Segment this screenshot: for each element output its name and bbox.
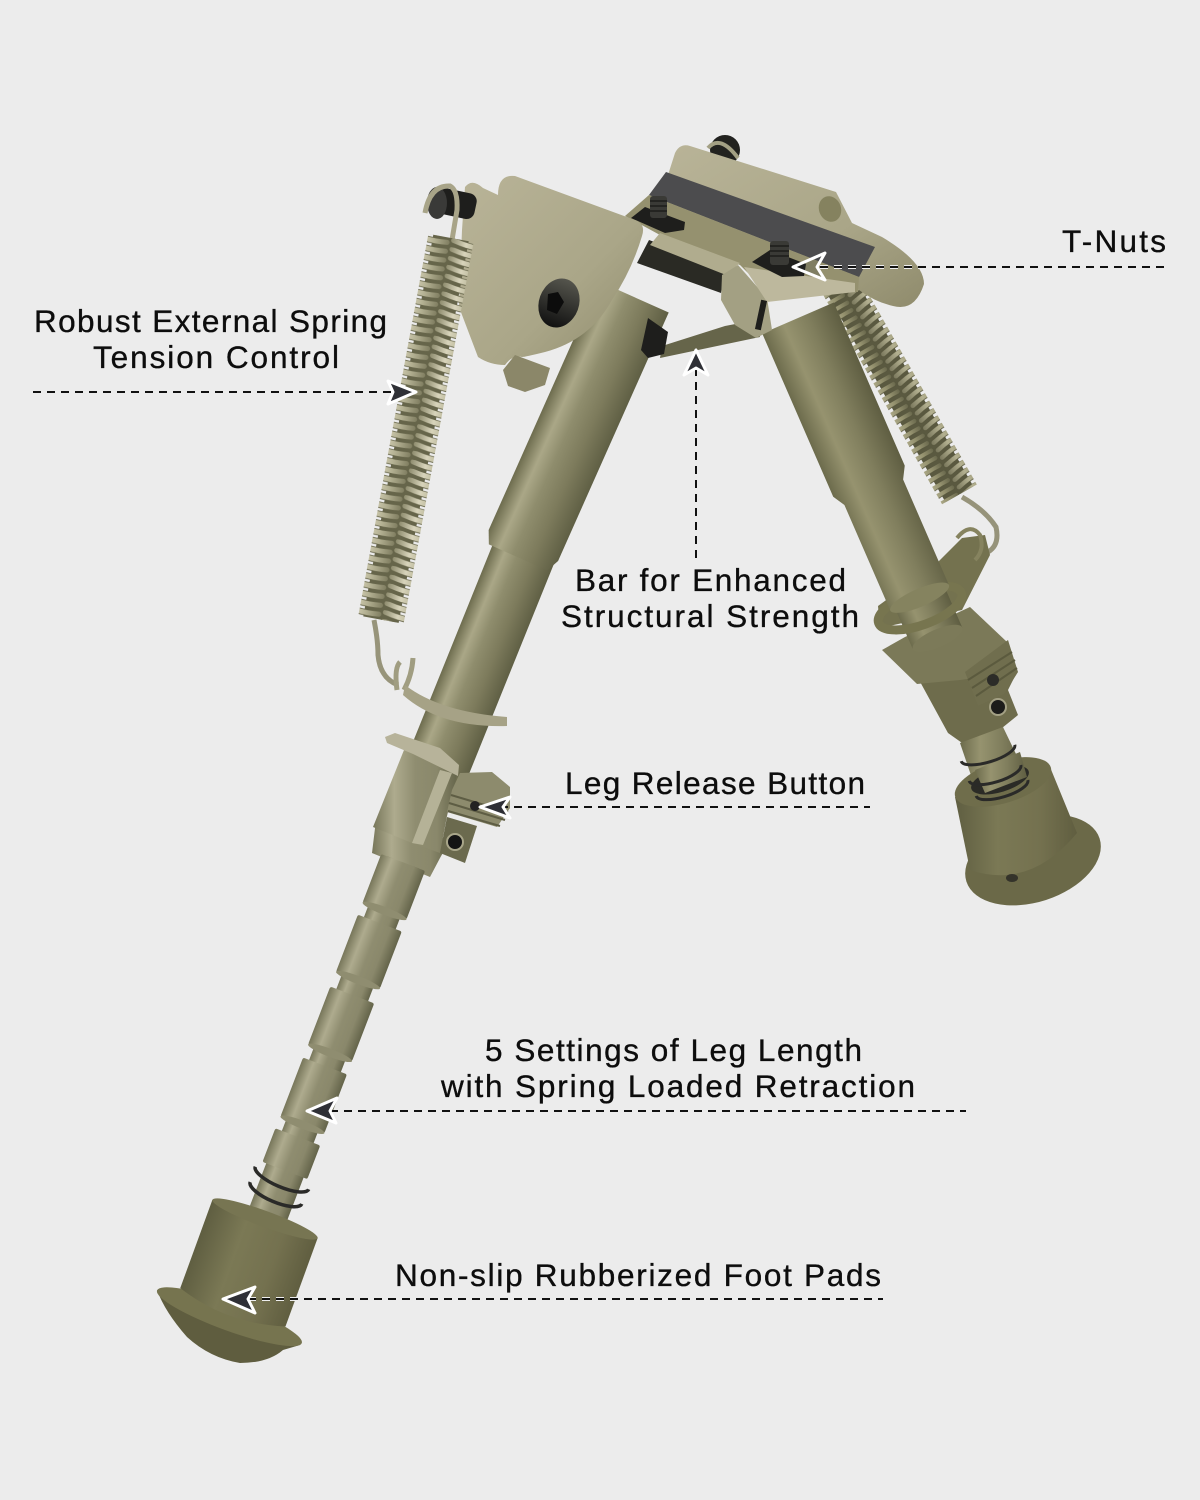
callout: foot pads <box>223 1257 883 1313</box>
label second line: with Spring Loaded Retraction <box>440 1068 915 1104</box>
leader line <box>500 806 870 808</box>
lower collar body <box>373 750 458 853</box>
right foot flange <box>953 798 1113 922</box>
arrow <box>793 253 825 280</box>
release button <box>447 772 510 850</box>
leader line <box>33 391 392 393</box>
callout: leg length <box>307 1032 966 1123</box>
right foot body <box>949 747 1077 882</box>
collar body light strip <box>412 770 452 845</box>
right leg tube <box>762 302 959 622</box>
label second line: Structural Strength <box>561 598 859 634</box>
label: T-Nuts <box>1062 223 1166 259</box>
pivot bolt <box>532 273 586 333</box>
lower collar ring <box>372 820 450 877</box>
rear screw <box>708 135 740 165</box>
upper collar plate <box>403 685 507 726</box>
left leg upper tube <box>483 282 669 573</box>
label second line: Tension Control <box>93 339 339 375</box>
right leg bracket <box>721 265 855 338</box>
connecting bar <box>641 318 760 358</box>
right leg collar stub <box>895 587 966 657</box>
leader halo <box>820 265 925 269</box>
right spring <box>815 260 997 552</box>
cross member highlight <box>650 233 740 275</box>
leader line <box>820 266 1168 268</box>
under rail member <box>625 195 859 295</box>
leader halo <box>248 1297 305 1301</box>
plate lower lug <box>503 355 550 392</box>
left foot <box>152 1185 340 1356</box>
right leg hook plate <box>878 535 990 628</box>
label: Non-slip Rubberized Foot Pads <box>395 1257 881 1293</box>
front T-nut <box>752 241 806 277</box>
leader line <box>330 1110 966 1112</box>
right leg shaft <box>960 727 1027 793</box>
rear T-nut <box>631 196 685 233</box>
black rail <box>649 172 875 277</box>
lower collar plate <box>385 733 459 776</box>
label: Bar for Enhanced <box>575 562 846 598</box>
callout: T-Nuts <box>793 223 1168 280</box>
dark under member <box>637 240 725 293</box>
left bracket plate <box>459 176 643 365</box>
foot flange <box>152 1277 307 1356</box>
leader line <box>248 1298 883 1300</box>
foot cylinder <box>177 1200 318 1335</box>
callout: bar <box>561 350 859 634</box>
arrow <box>388 381 416 404</box>
arrow <box>480 797 510 818</box>
plate side recess <box>815 193 845 225</box>
right foot spring coils <box>961 745 1030 805</box>
right leg lower block <box>882 607 1018 745</box>
left spring <box>358 234 474 690</box>
top plate <box>660 145 924 307</box>
right leg <box>762 302 1113 922</box>
foot top <box>210 1192 320 1246</box>
stepped leg, five settings <box>244 854 426 1228</box>
bipod illustration <box>152 135 1113 1363</box>
label: Leg Release Button <box>565 765 865 801</box>
release block <box>440 817 477 863</box>
left leg narrow tube <box>402 531 558 794</box>
tension nut <box>425 186 478 240</box>
left foot spring <box>238 1167 309 1234</box>
arrow <box>684 350 708 375</box>
leader line <box>695 370 697 558</box>
callout: leg release button <box>480 765 870 818</box>
arrow <box>307 1098 337 1123</box>
callout: spring <box>33 303 416 404</box>
label: 5 Settings of Leg Length <box>485 1032 862 1068</box>
label: Robust External Spring <box>34 303 387 339</box>
arrow <box>223 1287 255 1313</box>
left foot dome <box>157 1290 300 1363</box>
